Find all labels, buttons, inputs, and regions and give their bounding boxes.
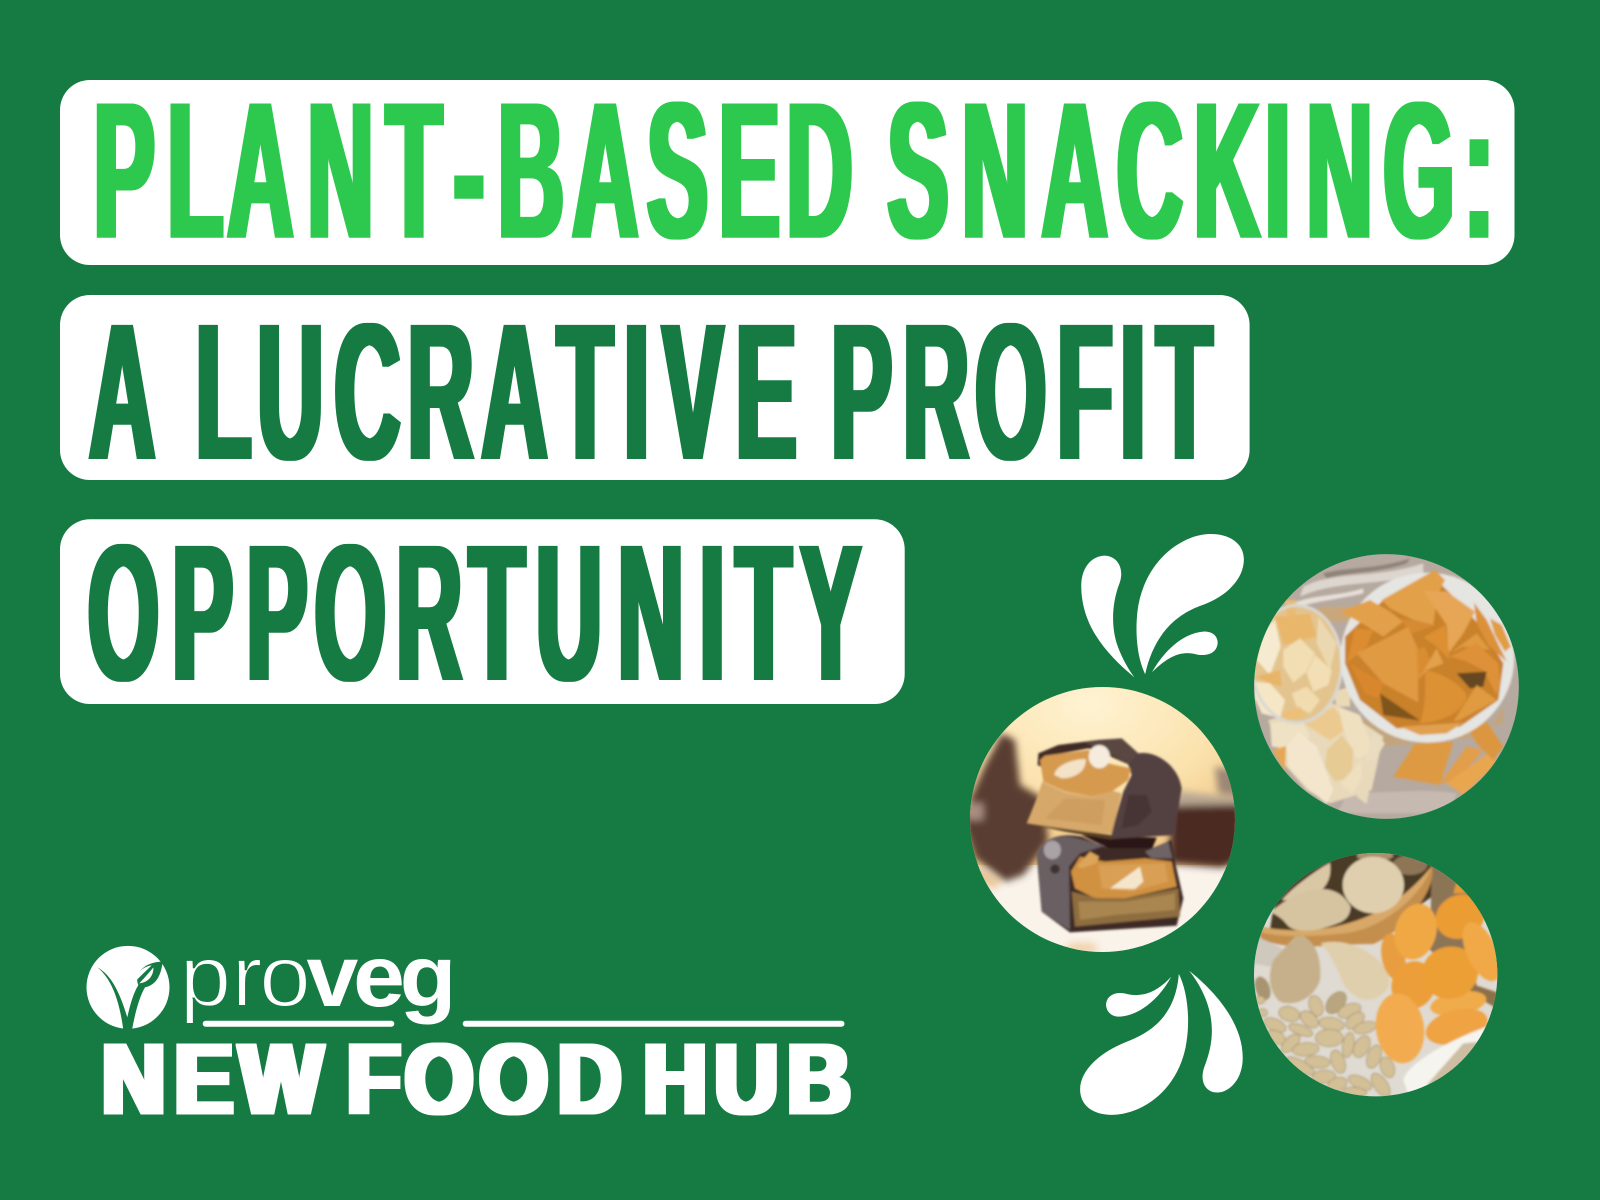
crisps on the board [1268,703,1383,803]
photo: bowls of crisps and tortilla chips [1250,550,1525,825]
wooden bowl rim [1260,866,1433,946]
upper bar [1044,825,1112,840]
apricots [1453,882,1467,893]
icon: bottom white splash [1080,971,1243,1115]
wordmark: new food hub: NEW FOOD HUB [102,1023,851,1135]
icon: top white splash [1081,534,1244,677]
photo: dried figs, apricots and pistachios [1250,850,1509,1100]
icon: proveg leaf roundel [86,946,169,1030]
title panel: line 1: PLANT-BASED SNACKING: [94,62,1494,280]
title panel: line 3: OPPORTUNITY [88,505,861,722]
wordmark: proveg: pro [180,928,311,1025]
pistachios [1252,975,1397,1100]
white bowl [1340,573,1514,743]
figs [1393,855,1427,875]
spoon of oats [1403,1025,1486,1092]
lower bar [1082,835,1157,850]
logo: ProVeg New Food Hub [86,928,851,1135]
photo: stacked chocolate snack bars [962,685,1242,962]
glass bowl with crisps [1252,605,1342,723]
bottom tortilla chips [1393,742,1453,785]
title panel: line 2: A LUCRATIVE PROFIT [89,284,1212,501]
underline strokes [203,1021,394,1027]
wordmark: proveg: veg [307,928,456,1025]
